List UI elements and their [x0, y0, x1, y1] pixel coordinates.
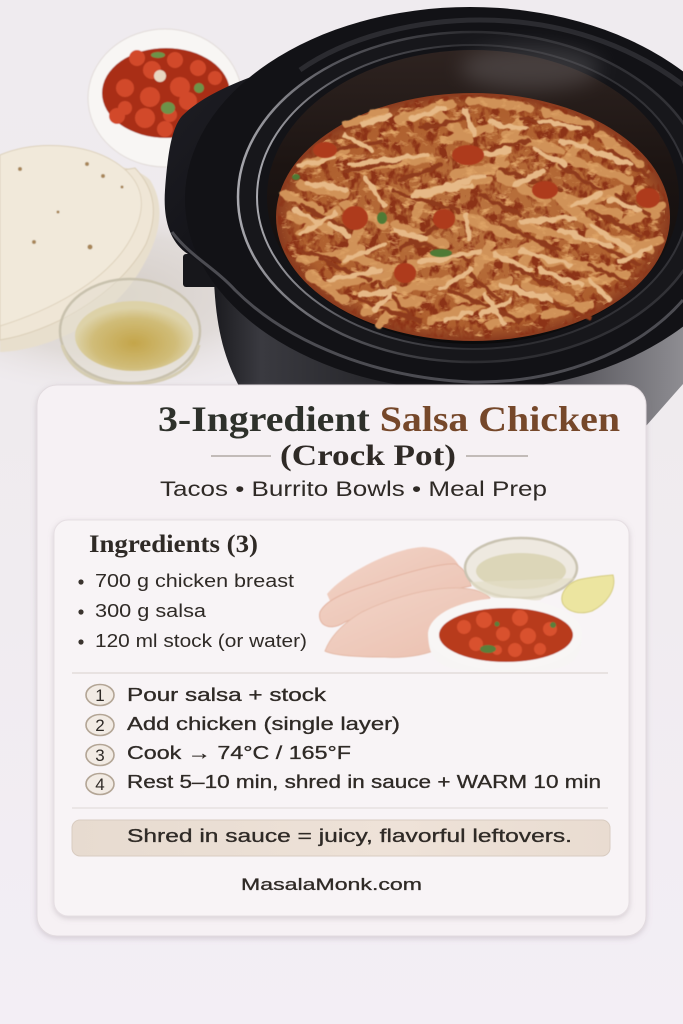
step 1 [86, 684, 327, 706]
step 2: 2 [95, 716, 105, 735]
illustration: crock pot with shredded chicken [165, 7, 683, 426]
illustration: glass of stock [465, 538, 577, 601]
pot base [214, 250, 683, 426]
illustration: lemon wedge [562, 575, 614, 613]
step 3 [86, 743, 351, 766]
illustration: raw chicken breasts [319, 547, 490, 657]
icon: small glass bowl of stock [60, 279, 200, 384]
sauce gaps [300, 118, 650, 322]
ingredient list [78, 571, 307, 651]
footer: website: MasalaMonk.com [241, 875, 422, 894]
divider [72, 807, 608, 809]
inner bowl [267, 50, 679, 344]
icon: small salsa bowl [88, 29, 242, 167]
dark sauce mottling [278, 95, 668, 339]
silver ring outer [238, 32, 683, 362]
herbs [292, 174, 452, 257]
ingredient list: 120 ml stock (or water) [95, 631, 307, 651]
step 1: 1 [95, 686, 105, 705]
step 2 [86, 714, 400, 736]
ingredient list: 700 g chicken breast [95, 571, 294, 591]
steam [460, 46, 600, 90]
rim lower silver strip [172, 232, 683, 382]
panel: ingredients and method [54, 520, 629, 916]
icon: tortilla stack [0, 145, 159, 352]
illustration: salsa bowl [428, 598, 582, 672]
ingredient list: 300 g salsa [95, 601, 207, 621]
step 4: Rest 5–10 min, shred in sauce + WARM 10 min [127, 772, 601, 792]
step 4: 4 [95, 775, 105, 794]
rim top gloss [300, 20, 683, 85]
pot handle foot [183, 254, 219, 287]
heading: ingredients: Ingredients (3) [89, 531, 258, 558]
food [276, 93, 670, 341]
tagline: Tacos • Burrito Bowls • Meal Prep [160, 478, 547, 501]
subtitle: crock pot: (Crock Pot) [280, 439, 456, 472]
light mottling [281, 97, 665, 337]
pot rim [185, 7, 683, 391]
step 4 [86, 772, 601, 794]
step 2: Add chicken (single layer) [127, 714, 400, 734]
callout [72, 820, 610, 856]
silver ring inner [257, 45, 683, 349]
tomato chunks [313, 142, 660, 283]
step 3: 3 [95, 746, 105, 765]
step 3: Cook → 74°C / 165°F [127, 743, 351, 763]
pot handle [165, 70, 380, 322]
panel: recipe card [37, 385, 646, 936]
callout: Shred in sauce = juicy, flavorful leftovers. [127, 826, 572, 846]
step 1: Pour salsa + stock [127, 685, 327, 705]
chicken shreds, medium [285, 100, 660, 325]
step list [86, 684, 601, 794]
divider [72, 672, 608, 674]
title: 3-Ingredient Salsa Chicken [158, 399, 620, 439]
chicken shreds, light [295, 108, 650, 325]
